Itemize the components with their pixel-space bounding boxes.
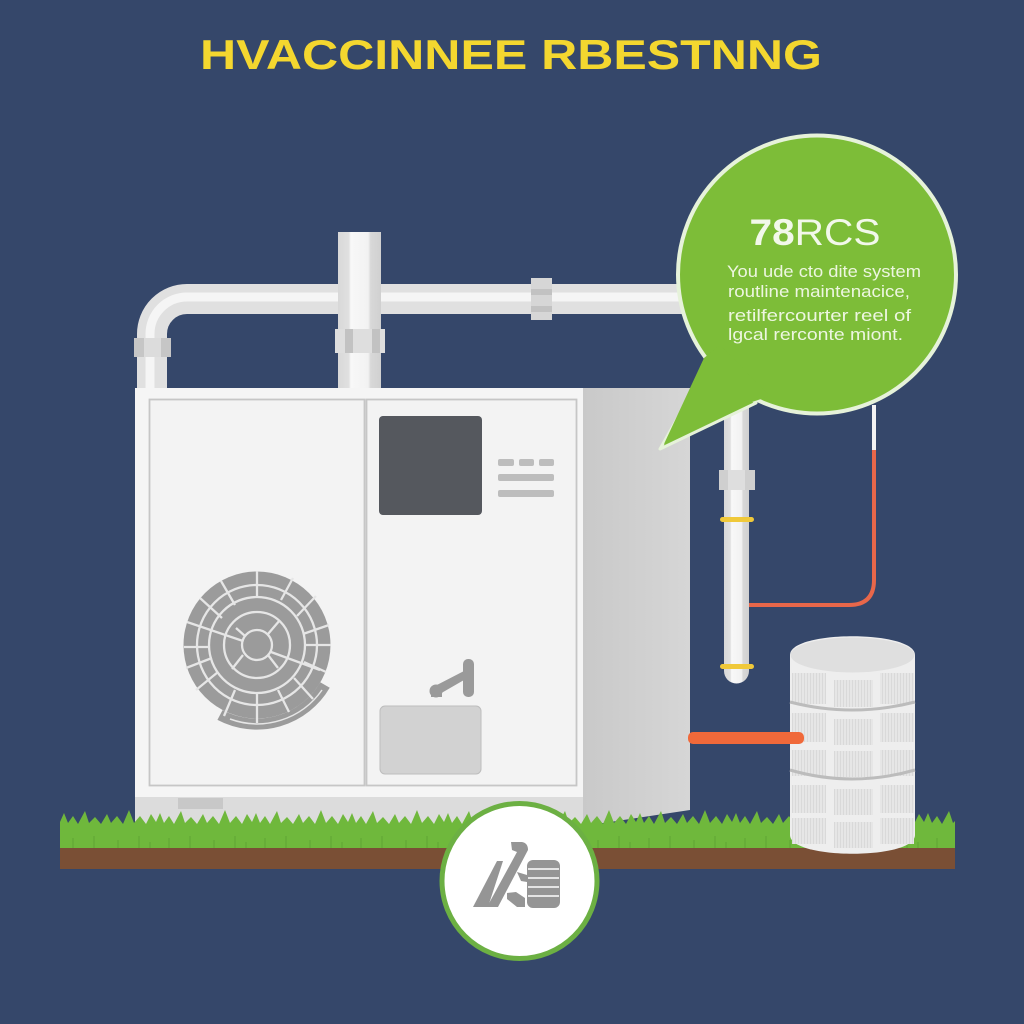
- callout body text: lgcal rerconte miont.: [728, 326, 903, 344]
- fan grille: [184, 571, 331, 724]
- callout body text: retilfercourter reel of: [728, 307, 912, 325]
- callout body text: You ude cto dite system: [727, 263, 921, 281]
- pipework above the unit: [134, 232, 690, 390]
- status indicator lines: [498, 459, 554, 497]
- right door panel: [366, 400, 576, 786]
- callout heading: 78RCS: [750, 212, 880, 253]
- callout body text: routline maintenacice,: [728, 283, 910, 301]
- tool strokes: [473, 842, 528, 907]
- callout body text: [727, 263, 921, 344]
- base tab: [178, 798, 223, 809]
- orange connector pipe: [688, 732, 804, 744]
- right vertical pipe: [719, 405, 755, 684]
- unit side face: [583, 388, 690, 826]
- cylindrical filter tank: [790, 636, 915, 854]
- badge icon: tools and coin stack: [442, 804, 597, 958]
- tank top: [790, 638, 914, 672]
- ground: grass and soil: [60, 810, 955, 869]
- control screen: [379, 416, 482, 515]
- unit base band: [135, 797, 583, 826]
- filter grille panels: [792, 673, 914, 848]
- unit front face: [135, 388, 583, 797]
- tank ribs: [790, 702, 915, 779]
- left door panel: [150, 400, 364, 786]
- coin stack: [527, 860, 560, 908]
- speech bubble callout: [660, 136, 956, 449]
- refrigerant line: [749, 405, 874, 605]
- title: HVACCINNEE RBESTNNG: [200, 31, 822, 78]
- lower access panel: [380, 706, 481, 774]
- HVAC unit: [135, 388, 690, 826]
- faucet-shaped handle: [430, 659, 474, 698]
